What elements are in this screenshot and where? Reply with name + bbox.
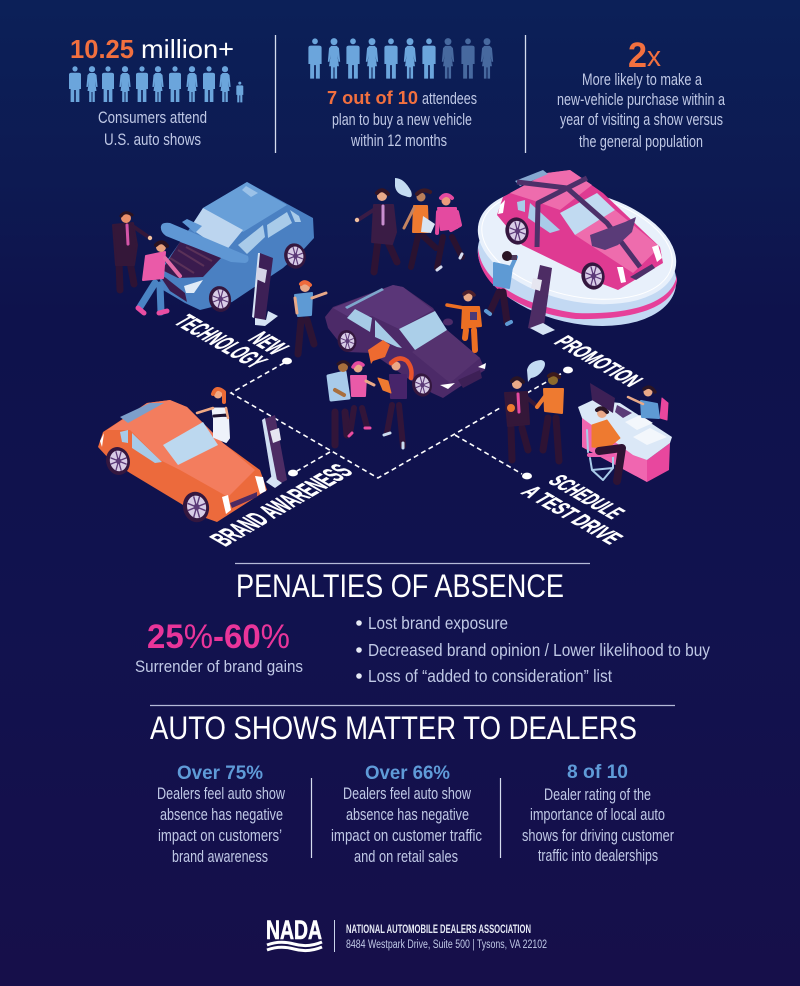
speech bubble: light blue — [527, 360, 545, 382]
label: new technology: NEW — [242, 328, 295, 359]
people row icons — [69, 66, 243, 102]
platform — [466, 170, 688, 344]
footer logo: NADA: NADA — [266, 915, 322, 945]
people row icons — [308, 38, 493, 79]
headline unit: million+ — [141, 34, 234, 64]
bullet list: Loss of “added to consideration” list — [368, 666, 612, 686]
heading: penalties of absence: PENALTIES OF ABSENCE — [236, 568, 564, 604]
caption — [98, 109, 207, 149]
description: year of visiting a show versus — [560, 111, 723, 129]
dealer column 3: Dealer rating of the — [544, 786, 651, 804]
caption: Consumers attend — [98, 109, 207, 127]
footer address: 8484 Westpark Drive, Suite 500 | Tysons, VA 22102 — [346, 939, 547, 951]
bullet list: Decreased brand opinion / Lower likelihood to buy — [368, 640, 710, 660]
seated man in orange — [587, 408, 622, 481]
multiplier: 2 — [628, 36, 647, 75]
illustration: purple car — [325, 285, 486, 399]
multiplier — [628, 36, 661, 75]
person: suit man shaking hands — [505, 378, 538, 460]
dealer column 1: Over 75% — [177, 763, 263, 784]
person: man in blue shirt — [295, 282, 326, 354]
dealer column 3 — [522, 762, 674, 865]
dealer column 3: importance of local auto — [530, 806, 665, 824]
stat: 2x — [557, 36, 726, 151]
bullet list — [356, 613, 710, 686]
stat: brand gains — [135, 618, 303, 676]
person: suit man with speech bubble — [355, 190, 397, 272]
person: man in light blue shirt — [328, 362, 349, 445]
stat text: within 12 months — [350, 132, 447, 150]
person: mechanic in pink shirt — [138, 242, 180, 313]
label: schedule a test drive: A TEST DRIVE — [515, 482, 628, 548]
dealer column 3: shows for driving customer — [522, 827, 674, 845]
person: woman in pink top — [349, 363, 374, 436]
stat text: 7 out of 10 — [327, 88, 418, 108]
dealer column 2: impact on customer traffic — [331, 827, 482, 845]
person: woman in pink sweater — [437, 195, 462, 270]
description: More likely to make a — [582, 71, 703, 89]
pink car — [497, 170, 663, 292]
dealer column 1: absence has negative — [160, 806, 283, 824]
dealer column 2: Dealers feel auto show — [343, 785, 471, 803]
person: man in orange shirt — [537, 374, 563, 461]
person: suit man by SUV — [113, 213, 152, 290]
label: brand awareness: BRAND AWARENESS — [203, 460, 359, 550]
receptionist — [628, 387, 668, 420]
dealer column 3: traffic into dealerships — [538, 847, 658, 865]
illustration: orange car — [98, 400, 267, 525]
speech bubble: orange — [368, 340, 390, 364]
footer address — [346, 924, 547, 951]
dealer column 2: Over 66% — [365, 763, 450, 784]
group: three attendees — [328, 358, 412, 448]
stat: brand gains: 25%-60% — [147, 618, 290, 656]
bullet list: Lost brand exposure — [368, 613, 508, 633]
monitor — [590, 383, 615, 413]
person: woman in orange suit — [447, 292, 481, 350]
stat: brand gains: Surrender of brand gains — [135, 657, 303, 676]
label: schedule a test drive — [515, 471, 630, 548]
footer logo: NADA — [266, 915, 322, 951]
headline number: 10.25 — [70, 34, 134, 64]
dashed connector network — [231, 358, 573, 479]
dealer column 2: and on retail sales — [354, 848, 458, 866]
person: photographer — [486, 251, 517, 324]
dealer column 1: Dealers feel auto show — [157, 785, 285, 803]
dealer column 3: 8 of 10 — [567, 762, 628, 783]
person: red-haired woman with folder — [378, 358, 412, 448]
illustration: pink car on platform — [466, 170, 688, 344]
stat text — [327, 88, 477, 150]
description: new-vehicle purchase within a — [557, 91, 726, 109]
stat text: plan to buy a new vehicle — [332, 111, 472, 129]
dealer column 1: brand awareness — [172, 848, 268, 866]
illustration: blue SUV — [158, 182, 314, 314]
dealer column 1 — [157, 763, 285, 866]
label: new technology: TECHNOLOGY — [168, 311, 273, 372]
info stand: new technology — [252, 253, 278, 326]
stat: 10.25 million — [69, 34, 243, 149]
info stand: brand awareness — [262, 415, 287, 488]
person: woman with bag — [404, 190, 436, 267]
description — [557, 71, 726, 151]
label: schedule a test drive: SCHEDULE — [542, 471, 630, 523]
person: woman in white dress — [197, 389, 229, 442]
label: promotion: PROMOTION — [548, 332, 648, 391]
info stand: promotion — [528, 265, 555, 335]
description: the general population — [579, 133, 703, 151]
dealer column 1: impact on customers’ — [158, 827, 282, 845]
dealer column 2 — [331, 763, 482, 866]
stat: 7 out of 10 — [308, 38, 493, 150]
reception desk — [578, 383, 672, 482]
heading: auto shows matter: AUTO SHOWS MATTER TO DEALERS — [150, 710, 637, 746]
multiplier: x — [647, 41, 661, 73]
label: new technology — [168, 311, 295, 372]
footer address: NATIONAL AUTOMOBILE DEALERS ASSOCIATION — [346, 924, 531, 936]
stat text: attendees — [422, 90, 477, 108]
speech bubble — [395, 178, 412, 197]
dealer column 2: absence has negative — [346, 806, 469, 824]
caption: U.S. auto shows — [104, 131, 201, 149]
